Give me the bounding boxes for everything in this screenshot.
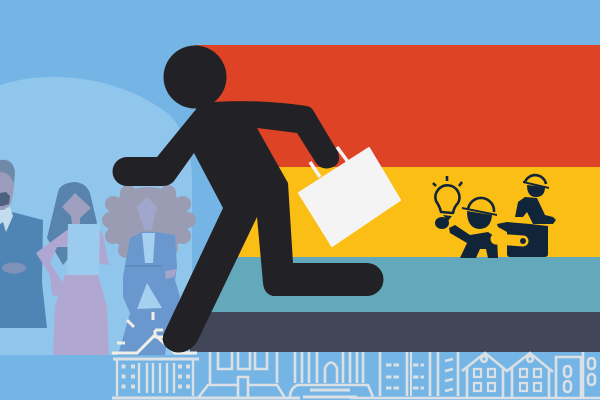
person: woman with paper xyxy=(36,182,109,355)
person: woman with curly hair xyxy=(102,185,196,355)
icon: workers with light bulb xyxy=(433,175,556,258)
person: man in suit xyxy=(0,160,47,328)
building: town hall xyxy=(198,352,300,398)
icon: briefcase xyxy=(299,147,400,246)
band: yellow xyxy=(235,167,600,257)
band: teal xyxy=(205,257,600,312)
figure body and limbs xyxy=(112,101,383,352)
arch background xyxy=(0,77,192,355)
worker: front with raised arm xyxy=(435,198,498,258)
icon: light bulb xyxy=(433,176,462,221)
band: dark slate xyxy=(190,312,600,352)
building: apartment towers xyxy=(380,352,458,396)
running figure xyxy=(112,46,383,352)
colour bands xyxy=(190,45,600,352)
people group xyxy=(0,160,196,355)
band: red xyxy=(195,45,600,167)
building: gabled houses xyxy=(350,353,555,398)
building skyline xyxy=(112,312,600,398)
figure head xyxy=(164,46,226,108)
worker: rear with box and wrench xyxy=(496,175,556,257)
building: museum xyxy=(290,352,373,397)
building: columned hall xyxy=(112,312,199,398)
building: narrow block xyxy=(555,352,600,398)
